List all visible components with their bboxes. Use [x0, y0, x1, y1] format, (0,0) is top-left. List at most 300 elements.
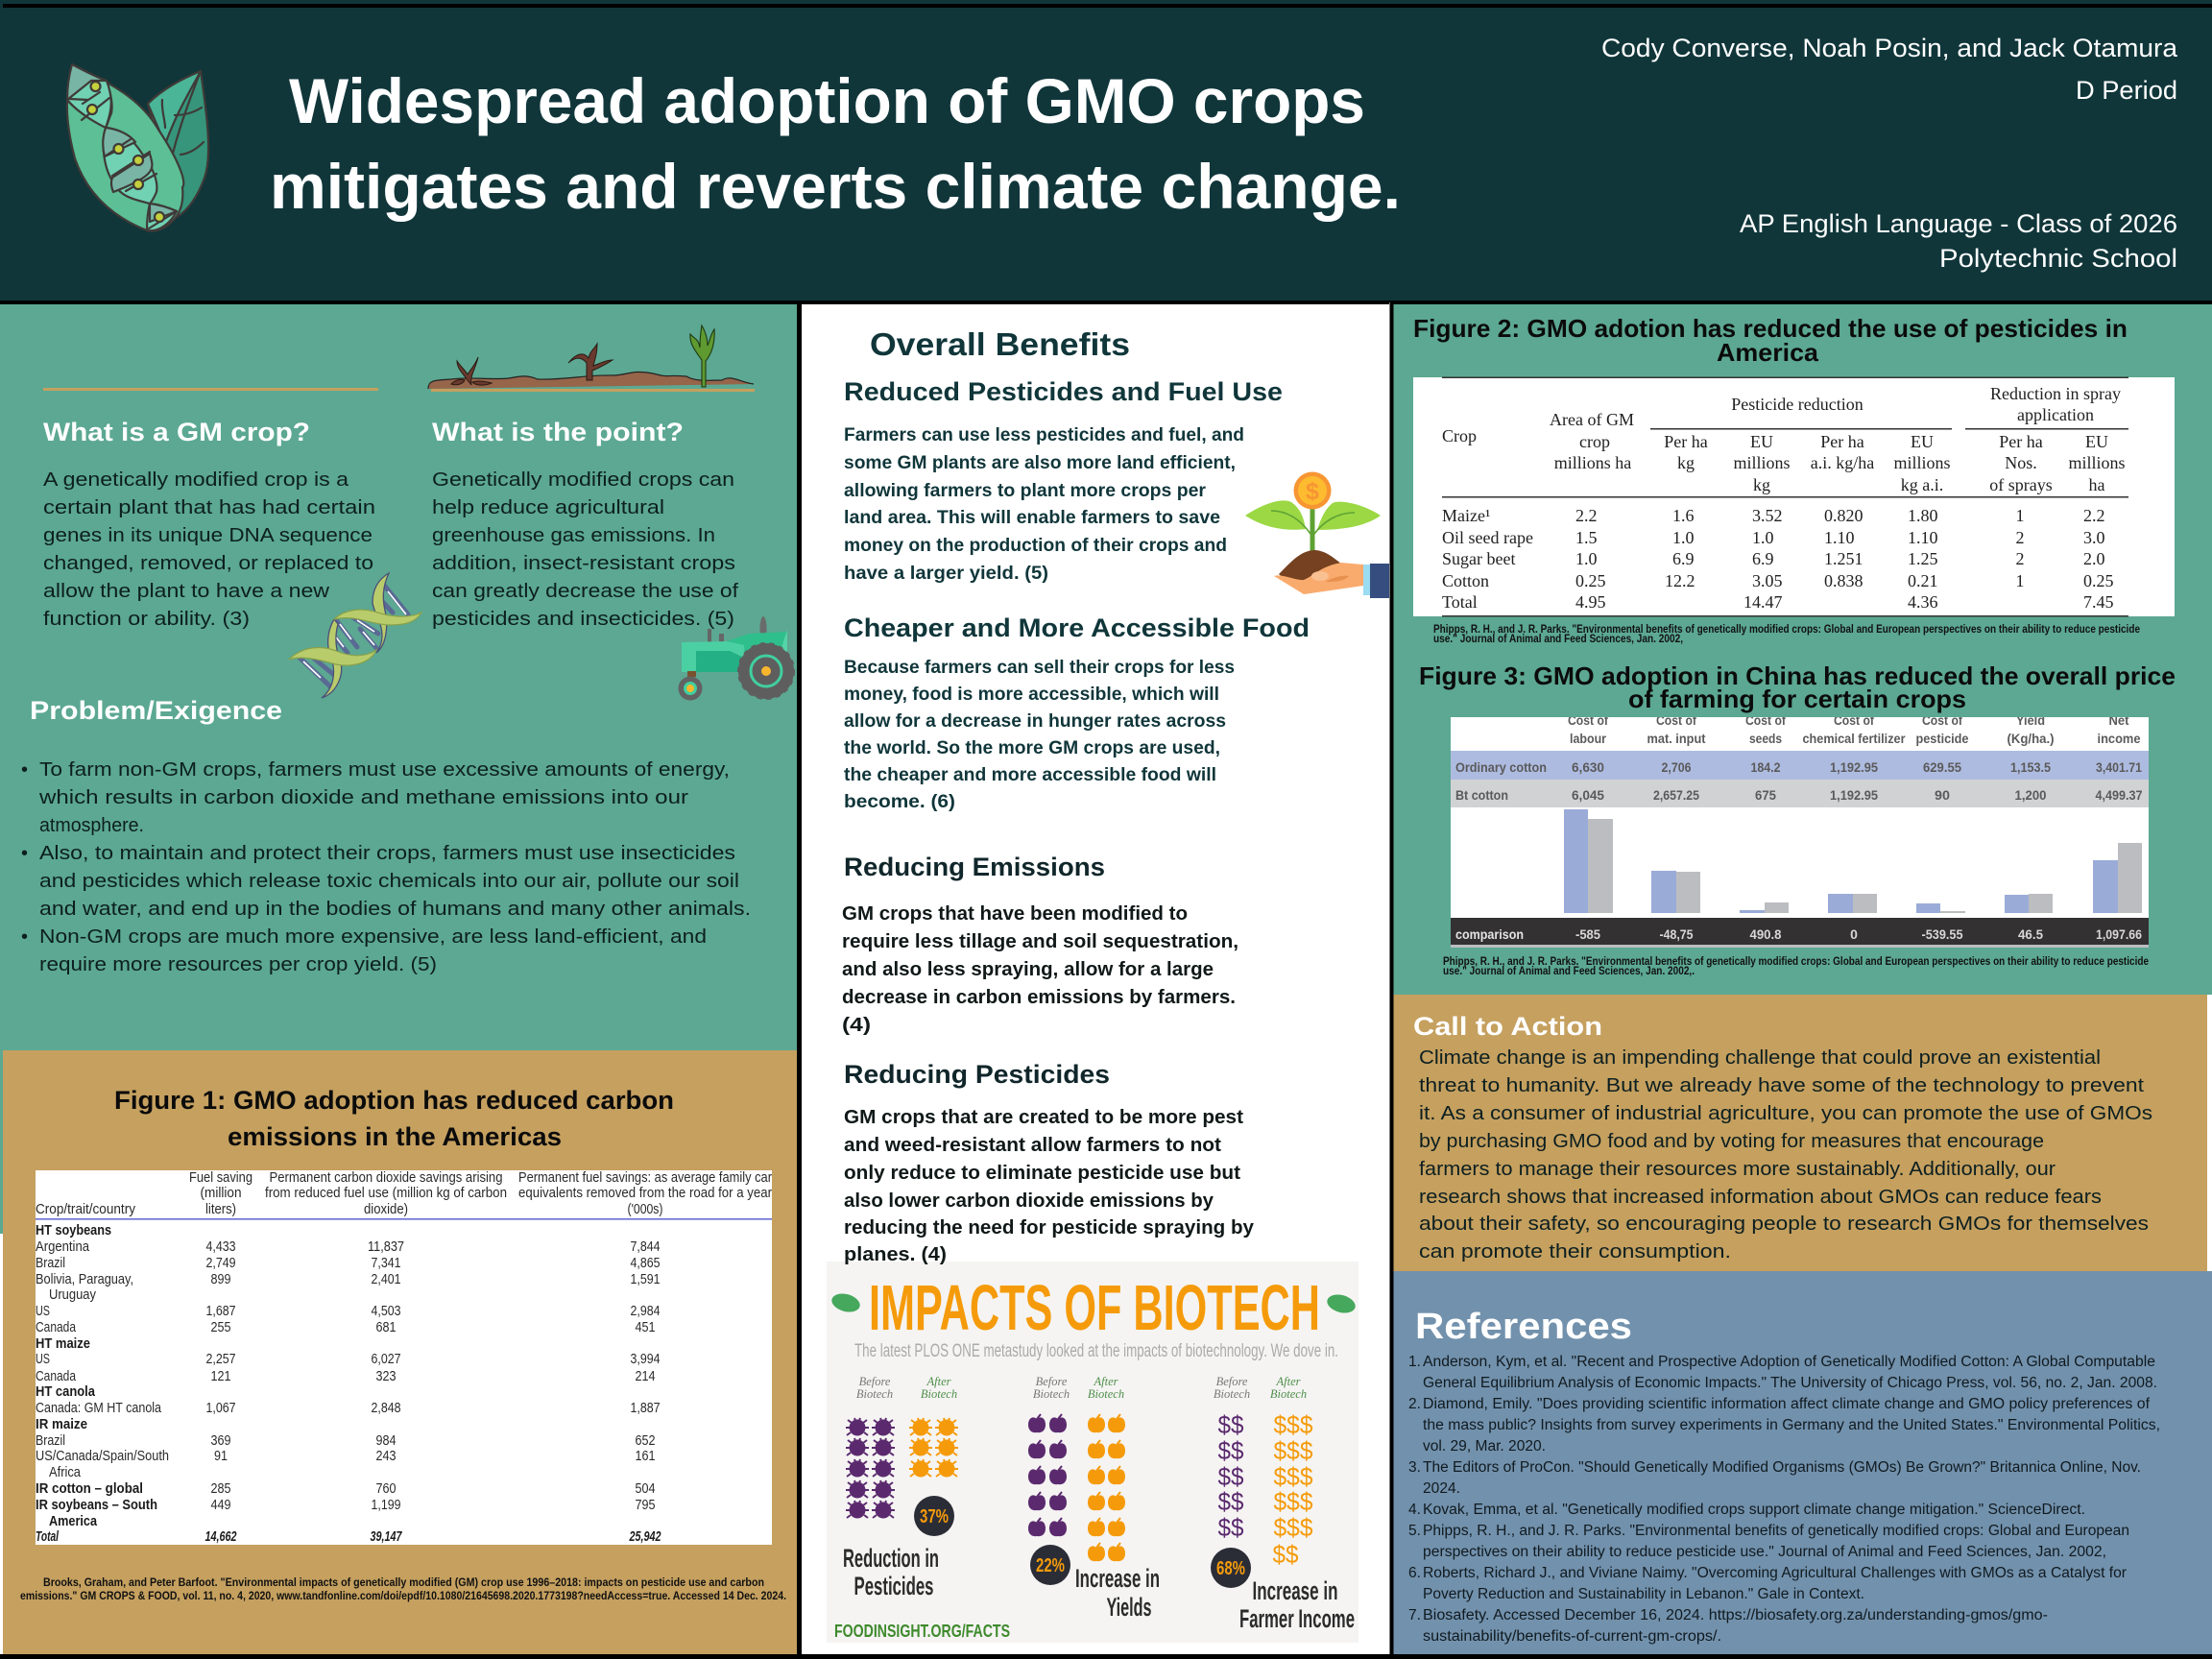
table: pesticide reduction: 2.2 [2083, 506, 2104, 525]
authors and class: D Period [2076, 76, 2177, 105]
heading: reducing pesticides: Reducing Pesticides [844, 1060, 1110, 1089]
list: references: perspectives on their ability to reduce pesticide use." Journal of Animal and Feed Sciences, Jan. 2002, [1423, 1544, 2106, 1560]
table: carbon savings: Brazil [36, 1433, 65, 1449]
citation: figure 1: emissions." GM CROPS & FOOD, vol. 11, no. 4, 2020, www.tandfonline.com/doi/epdf/10.1080/21645698.2020.1773198?needAccess=true. Accessed 14 Dec. 2024. [20, 1591, 786, 1602]
table and bar chart: cotton cost comparison: chemical fertilizer [1803, 731, 1906, 746]
table: carbon savings: Crop/trait/country [36, 1202, 136, 1217]
table and bar chart: cotton cost comparison: comparison [1455, 926, 1524, 942]
figure 2 title: America [1717, 338, 1819, 367]
table: pesticide reduction: EU [1911, 432, 1934, 451]
pictogram: farmer income dollars: $$ [1217, 1462, 1244, 1491]
pictogram: yields apples [1028, 1414, 1160, 1622]
table: pesticide reduction: 0.25 [2083, 571, 2114, 590]
table: pesticide reduction: 0.25 [1575, 571, 1605, 590]
table: pesticide reduction: crop [1579, 432, 1610, 451]
table: carbon savings: 795 [636, 1498, 655, 1513]
table: pesticide reduction: 2.2 [1575, 506, 1598, 525]
table: pesticide reduction: EU [2085, 432, 2108, 451]
table: carbon savings: Brazil [36, 1256, 65, 1271]
table and bar chart: cotton cost comparison: Cost of [1568, 712, 1608, 728]
text block: what is the point: can greatly decrease the use of [432, 581, 739, 602]
table and bar chart: cotton cost comparison: 184.2 [1751, 759, 1781, 775]
table: pesticide reduction: Total [1442, 592, 1478, 612]
list: references: 2. [1408, 1396, 1421, 1412]
text block: reducing emissions: require less tillage and soil sequestration, [842, 931, 1238, 952]
panel: call to action [1393, 995, 2207, 1271]
list: references: 6. [1408, 1565, 1421, 1581]
citation: figure 1 [20, 1577, 786, 1602]
table: carbon savings: 91 [214, 1449, 228, 1464]
table and bar chart: cotton cost comparison: Yield [2016, 712, 2045, 728]
text block: what is a GM crop [43, 469, 375, 630]
before and after labels: After [926, 1375, 951, 1388]
pictogram: farmer income dollars: $$ [1273, 1540, 1299, 1569]
text block: what is the point: help reduce agricultural [432, 497, 664, 518]
table: carbon savings: Permanent fuel savings: as average family car [518, 1170, 772, 1186]
pictogram: yields apples: 22% [1036, 1555, 1065, 1576]
table: carbon savings: America [49, 1514, 98, 1529]
table: pesticide reduction: millions [1733, 453, 1791, 472]
table: carbon savings: Africa [49, 1465, 82, 1480]
text block: reducing pesticides: also lower carbon dioxide emissions by [844, 1190, 1214, 1212]
list: problem bullets: which results in carbon dioxide and methane emissions into our [38, 787, 688, 808]
table: pesticide reduction: 0.838 [1824, 571, 1863, 590]
heading: overall benefits: Overall Benefits [870, 326, 1130, 362]
before and after labels: Before [1216, 1375, 1248, 1388]
table and bar chart: cotton cost comparison: 629.55 [1923, 759, 1961, 775]
table and bar chart: cotton cost comparison: Cost of [1656, 712, 1696, 728]
text block: reduced pesticides and fuel use: money on the production of their crops and [844, 535, 1227, 556]
table: carbon savings: 2,401 [371, 1272, 401, 1287]
panel: right green figures [1393, 304, 2212, 995]
citation: figure 2 [1433, 624, 2140, 645]
text block: reducing pesticides: only reduce to eliminate pesticide use but [844, 1163, 1240, 1184]
list: references: the mass public? Insights from survey experiments in Germany and the United States." Environmental Politics, [1423, 1417, 2160, 1433]
list: references: 1. [1408, 1354, 1421, 1370]
text block: what is a GM crop: allow the plant to have a new [43, 581, 330, 602]
before and after labels [856, 1375, 1307, 1401]
list: references [1408, 1354, 2160, 1645]
table: pesticide reduction: 1.25 [1908, 549, 1937, 568]
before and after labels: Biotech [1214, 1387, 1250, 1401]
table: pesticide reduction: Reduction in spray [1990, 384, 2121, 403]
table and bar chart: cotton cost comparison: 3,401.71 [2096, 759, 2142, 775]
table and bar chart: cotton cost comparison: mat. input [1647, 731, 1706, 746]
table and bar chart: cotton cost comparison: seeds [1749, 731, 1782, 746]
citation: figure 3 [1443, 956, 2149, 977]
table and bar chart: cotton cost comparison: -585 [1575, 926, 1600, 942]
text block: reducing emissions [842, 903, 1238, 1036]
table and bar chart: cotton cost comparison: 1,153.5 [2010, 759, 2051, 775]
figure 3 title: of farming for certain crops [1628, 685, 1966, 713]
icon: tractor [678, 616, 794, 701]
icon: DNA helix [289, 573, 421, 698]
text block: call to action: by purchasing GMO food and by voting for measures that encourage [1419, 1131, 2044, 1152]
list: references: 5. [1408, 1523, 1421, 1539]
table: pesticide reduction: kg [1677, 453, 1695, 472]
text block: cheaper food: the world. So the more GM crops are used, [844, 737, 1220, 758]
panel: center overall benefits [802, 304, 1391, 1654]
text block: what is a GM crop: function or ability. (3) [43, 609, 250, 630]
text block: cheaper food: the cheaper and more accessible food will [844, 764, 1216, 785]
table and bar chart: cotton cost comparison: (Kg/ha.) [2007, 731, 2055, 746]
table and bar chart: cotton cost comparison: 90 [1935, 787, 1950, 803]
table and bar chart: cotton cost comparison: 0 [1850, 926, 1858, 942]
before and after labels: Before [859, 1375, 891, 1388]
text block: what is a GM crop: changed, removed, or replaced to [43, 553, 373, 574]
table: carbon savings: 214 [636, 1369, 655, 1384]
panel: left green intro [0, 304, 798, 1234]
text block: call to action [1419, 1047, 2152, 1262]
pictogram: farmer income dollars: $$ [1217, 1487, 1244, 1516]
table: carbon savings: 4,503 [371, 1304, 401, 1319]
table: carbon savings: 899 [211, 1272, 230, 1287]
heading: cheaper food: Cheaper and More Accessible Food [844, 613, 1310, 642]
infographic title [830, 1272, 1358, 1361]
table: carbon savings: Uruguay [49, 1287, 97, 1303]
table: carbon savings: 6,027 [371, 1352, 401, 1367]
text block: call to action: research shows that increased information about GMOs can reduce fears [1419, 1187, 2102, 1208]
table: pesticide reduction: kg a.i. [1901, 475, 1943, 494]
table: pesticide reduction: 2.0 [2083, 549, 2104, 568]
table: carbon savings: IR maize [36, 1417, 87, 1432]
text block: call to action: it. As a consumer of industrial agriculture, you can promote the use of GMOs [1419, 1103, 2152, 1124]
text block: reducing pesticides: reducing the need for pesticide spraying by [844, 1217, 1255, 1238]
table: pesticide reduction: Per ha [1820, 432, 1864, 451]
heading: reducing emissions: Reducing Emissions [844, 853, 1105, 881]
table: pesticide reduction: 1.10 [1908, 528, 1937, 547]
table: carbon savings: 3,994 [630, 1352, 661, 1367]
icon: soil and growing seedlings [428, 325, 755, 392]
pictogram: farmer income dollars: $$$ [1273, 1513, 1313, 1542]
list: references: The Editors of ProCon. "Should Genetically Modified Organisms (GMOs) Be Grown?" Britannica Online, Nov. [1423, 1459, 2141, 1476]
title [270, 65, 1401, 222]
table and bar chart: cotton cost comparison: 2,706 [1661, 759, 1692, 775]
table: pesticide reduction: of sprays [1989, 475, 2053, 494]
table: carbon savings: 25,942 [629, 1529, 661, 1545]
pictogram: farmer income dollars: Increase in [1252, 1576, 1338, 1605]
table: carbon savings: equivalents removed from the road for a year [518, 1186, 772, 1201]
text block: call to action: threat to humanity. But we already have some of the technology to prevent [1419, 1075, 2145, 1096]
table: carbon savings: IR soybeans – South [36, 1498, 157, 1513]
table: pesticide reduction: a.i. kg/ha [1811, 453, 1874, 472]
table: carbon savings: 681 [376, 1320, 396, 1335]
pictogram: pesticides bugs: 37% [920, 1506, 949, 1527]
table: carbon savings: Argentina [36, 1239, 90, 1255]
table: carbon savings: 39,147 [371, 1529, 402, 1545]
table: pesticide reduction: 1 [2016, 506, 2024, 525]
table: carbon savings: 2,848 [371, 1401, 401, 1416]
table: pesticide reduction: 4.95 [1575, 592, 1605, 612]
table: carbon savings: 760 [376, 1481, 396, 1497]
table: pesticide reduction: ha [2089, 475, 2104, 494]
table: carbon savings: Canada: GM HT canola [36, 1401, 162, 1416]
pictogram: pesticides bugs: Pesticides [854, 1572, 933, 1600]
text block: call to action: can promote their consumption. [1419, 1241, 1731, 1262]
citation: figure 3: use." Journal of Animal and Feed Sciences, Jan. 2002,. [1443, 966, 1695, 977]
infographic: impacts of biotech [827, 1262, 1358, 1643]
heading: what is the point: What is the point? [432, 418, 684, 446]
list: references: Biosafety. Accessed December 16, 2024. https://biosafety.org.za/understanding-gmos/gmo- [1423, 1607, 2048, 1623]
table and bar chart: cotton cost comparison: 46.5 [2018, 926, 2043, 942]
table: pesticide reduction: 1.0 [1575, 549, 1598, 568]
table: pesticide reduction: 1.80 [1908, 506, 1937, 525]
authors and class: Polytechnic School [1939, 244, 2177, 273]
table: pesticide reduction: 0.21 [1908, 571, 1937, 590]
list: references: Phipps, R. H., and J. R. Parks. "Environmental benefits of genetically modified crops: Global and European [1423, 1523, 2129, 1539]
table and bar chart: cotton cost comparison: Cost of [1922, 712, 1962, 728]
table: pesticide reduction: Cotton [1442, 571, 1489, 590]
text block: what is a GM crop: certain plant that has had certain [43, 497, 375, 518]
text block: what is the point: pesticides and insecticides. (5) [432, 609, 734, 630]
text block: reduced pesticides and fuel use: Farmers can use less pesticides and fuel, and [844, 424, 1244, 445]
table: carbon savings: 161 [636, 1449, 655, 1464]
text block: call to action: Climate change is an impending challenge that could prove an existential [1419, 1047, 2101, 1069]
table: carbon savings: 2,984 [630, 1304, 661, 1319]
icon: hand holding money plant [1245, 472, 1391, 598]
text block: reducing pesticides [844, 1107, 1255, 1265]
table and bar chart: cotton cost comparison: Net [2108, 712, 2129, 728]
heading: what is a GM crop: What is a GM crop? [43, 418, 310, 446]
table: carbon savings: 14,662 [205, 1529, 236, 1545]
table: carbon savings: 449 [211, 1498, 230, 1513]
pictogram: farmer income dollars: $$ [1217, 1410, 1244, 1439]
figure 2 title [1413, 314, 2128, 367]
list: problem bullets: require more resources per crop yield. (5) [39, 954, 437, 975]
table: carbon savings: US/Canada/Spain/South [36, 1449, 169, 1464]
table: pesticide reduction: kg [1753, 475, 1770, 494]
table: pesticide reduction: application [2017, 405, 2094, 424]
list: references: Poverty Reduction and Sustainability in Lebanon." Gale in Context. [1423, 1586, 1864, 1602]
pictogram: farmer income dollars: $$$ [1273, 1410, 1313, 1439]
pictogram: farmer income dollars: $$ [1217, 1436, 1244, 1465]
list: references: sustainability/benefits-of-current-gm-crops/. [1423, 1628, 1721, 1645]
list: problem bullets: • [21, 926, 28, 948]
table: pesticide reduction: 14.47 [1743, 592, 1782, 612]
text block: reduced pesticides and fuel use [844, 424, 1244, 584]
list: references: 2024. [1423, 1480, 1460, 1497]
text block: what is a GM crop: genes in its unique DNA sequence [43, 525, 373, 546]
text block: reduced pesticides and fuel use: allowing farmers to plant more crops per [844, 480, 1206, 501]
table: pesticide reduction: 1.10 [1824, 528, 1855, 547]
table: carbon savings: 323 [376, 1369, 396, 1384]
figure 3 title: Figure 3: GMO adoption in China has reduced the overall price [1419, 661, 2176, 690]
table and bar chart: cotton cost comparison: Cost of [1745, 712, 1786, 728]
table: pesticide reduction: 2 [2016, 549, 2024, 568]
table: pesticide reduction: Nos. [2005, 453, 2037, 472]
table and bar chart: cotton cost comparison: Ordinary cotton [1455, 759, 1547, 775]
table and bar chart: cotton cost comparison: pesticide [1916, 731, 1969, 746]
table and bar chart: cotton cost comparison: 2,657.25 [1653, 787, 1699, 803]
table: carbon savings: HT canola [36, 1384, 96, 1400]
table: carbon savings: 2,257 [205, 1352, 236, 1367]
pictogram: farmer income dollars: 68% [1216, 1558, 1245, 1579]
table: carbon savings: US [36, 1304, 50, 1319]
text block: what is the point: greenhouse gas emissions. In [432, 525, 715, 546]
table: carbon savings: Bolivia, Paraguay, [36, 1272, 133, 1287]
list: references: 4. [1408, 1502, 1421, 1518]
heading: reduced pesticides and fuel use: Reduced Pesticides and Fuel Use [844, 377, 1283, 406]
table: pesticide reduction: 4.36 [1908, 592, 1937, 612]
table and bar chart: cotton cost comparison: income [2097, 731, 2141, 746]
infographic title: IMPACTS OF BIOTECH [869, 1272, 1320, 1344]
table: pesticide reduction: Per ha [1999, 432, 2043, 451]
icon: hand holding money plant: $ [1306, 478, 1319, 505]
text block: cheaper food: allow for a decrease in hunger rates across [844, 710, 1226, 732]
table: carbon savings: 285 [211, 1481, 230, 1497]
table: pesticide reduction: Per ha [1664, 432, 1708, 451]
pictogram: pesticides bugs [843, 1418, 958, 1600]
pictogram: pesticides bugs: Reduction in [843, 1544, 939, 1573]
before and after labels: Biotech [1270, 1387, 1307, 1401]
text block: cheaper food: become. (6) [844, 791, 955, 812]
table: pesticide reduction: 1.5 [1575, 528, 1598, 547]
table and bar chart: cotton cost comparison: 6,045 [1572, 787, 1604, 803]
table: pesticide reduction: 6.9 [1672, 549, 1694, 568]
text block: reducing emissions: decrease in carbon emissions by farmers. [842, 987, 1236, 1008]
table: carbon savings: Fuel saving [189, 1170, 252, 1186]
table: pesticide reduction: 2 [2016, 528, 2024, 547]
heading: references: References [1415, 1307, 1632, 1347]
table: pesticide reduction [1413, 376, 2175, 616]
text block: reduced pesticides and fuel use: land area. This will enable farmers to save [844, 507, 1220, 528]
table and bar chart: cotton cost comparison: 1,192.95 [1830, 759, 1878, 775]
text block: cheaper food: money, food is more accessible, which will [844, 684, 1219, 705]
text block: what is the point: Genetically modified crops can [432, 469, 734, 491]
table: carbon savings: 451 [636, 1320, 655, 1335]
before and after labels: After [1275, 1375, 1301, 1388]
panel: references [1393, 1271, 2212, 1654]
authors and class: AP English Language - Class of 2026 [1740, 209, 2177, 238]
table and bar chart: cotton cost comparison: 675 [1755, 787, 1776, 803]
list: problem bullets: and pesticides which release toxic chemicals into our air, pollute our soil [39, 871, 739, 892]
table: carbon savings: US [36, 1352, 50, 1367]
figure 1 title: emissions in the Americas [228, 1122, 562, 1151]
table: carbon savings: 121 [211, 1369, 230, 1384]
text block: what is the point: addition, insect-resistant crops [432, 553, 735, 574]
table and bar chart: cotton cost comparison: 1,200 [2014, 787, 2047, 803]
table: carbon savings: ('000s) [628, 1202, 662, 1217]
text block: reduced pesticides and fuel use: some GM plants are also more land efficient, [844, 452, 1236, 473]
list: references: vol. 29, Mar. 2020. [1423, 1438, 1546, 1455]
title: mitigates and reverts climate change. [270, 151, 1401, 222]
table: pesticide reduction: millions [2068, 453, 2126, 472]
table: carbon savings: 652 [636, 1433, 655, 1449]
table: pesticide reduction: Oil seed rape [1442, 528, 1533, 547]
list: problem bullets: Also, to maintain and protect their crops, farmers must use insecticides [39, 843, 735, 864]
table: pesticide reduction: 3.05 [1752, 571, 1782, 590]
table and bar chart: cotton cost comparison: Cost of [1834, 712, 1874, 728]
pictogram: farmer income dollars: Farmer Income [1239, 1604, 1355, 1633]
table: carbon savings: 255 [211, 1320, 230, 1335]
figure 2 title: Figure 2: GMO adotion has reduced the use of pesticides in [1413, 314, 2128, 343]
header band [0, 0, 2212, 304]
list: references: 7. [1408, 1607, 1421, 1623]
figure 1 title [114, 1086, 674, 1151]
table and bar chart: cotton cost comparison: 1,192.95 [1830, 787, 1878, 803]
authors and class: Cody Converse, Noah Posin, and Jack Otamura [1601, 34, 2178, 62]
table and bar chart: cotton cost comparison: -48,75 [1659, 926, 1694, 942]
before and after labels: Biotech [1088, 1387, 1124, 1401]
list: problem bullets: Non-GM crops are much more expensive, are less land-efficient, and [39, 926, 707, 948]
table: pesticide reduction: millions [1893, 453, 1951, 472]
table and bar chart: cotton cost comparison: 490.8 [1749, 926, 1782, 942]
table: carbon savings: HT soybeans [36, 1223, 111, 1238]
table: carbon savings: 1,887 [630, 1401, 661, 1416]
title: Widespread adoption of GMO crops [289, 65, 1365, 136]
text block: what is a GM crop: A genetically modified crop is a [43, 469, 349, 491]
table: carbon savings: IR cotton – global [36, 1481, 143, 1497]
figure 1 title: Figure 1: GMO adoption has reduced carbon [114, 1086, 674, 1115]
list: references: Roberts, Richard J., and Viviane Naimy. "Overcoming Agricultural Challenges with GMOs as a Catalyst for [1423, 1565, 2127, 1581]
table and bar chart: cotton cost comparison [1451, 712, 2149, 948]
table: carbon savings: from reduced fuel use (million kg of carbon [265, 1186, 507, 1201]
table: carbon savings: 2,749 [205, 1256, 236, 1271]
list: problem bullets: • [21, 843, 28, 864]
citation: figure 2: use." Journal of Animal and Feed Sciences, Jan. 2002, [1433, 634, 1683, 645]
authors and class [1601, 34, 2178, 273]
before and after labels: Before [1036, 1375, 1068, 1388]
table: carbon savings: 369 [211, 1433, 230, 1449]
table: pesticide reduction: Crop [1442, 426, 1477, 445]
table: carbon savings: liters) [205, 1202, 236, 1217]
table: carbon savings: 11,837 [368, 1239, 404, 1255]
table: carbon savings: Canada [36, 1320, 77, 1335]
table: pesticide reduction: 7.45 [2083, 592, 2114, 612]
list: references: Kovak, Emma, et al. "Genetically modified crops support climate change mitigation." ScienceDirect. [1423, 1502, 2085, 1518]
text block: reducing emissions: GM crops that have been modified to [842, 903, 1188, 925]
pictogram: farmer income dollars [1211, 1410, 1355, 1633]
table: carbon savings: 1,067 [205, 1401, 236, 1416]
table: carbon savings: 4,865 [630, 1256, 661, 1271]
table: pesticide reduction: 3.52 [1752, 506, 1782, 525]
list: problem bullets: To farm non-GM crops, farmers must use excessive amounts of energy, [39, 759, 730, 781]
before and after labels: Biotech [1033, 1387, 1070, 1401]
table: pesticide reduction: Pesticide reduction [1731, 395, 1863, 414]
text block: cheaper food: Because farmers can sell their crops for less [844, 657, 1235, 678]
table: pesticide reduction: Area of GM [1550, 410, 1634, 429]
table and bar chart: cotton cost comparison: Bt cotton [1455, 787, 1508, 803]
table: pesticide reduction: 1.0 [1672, 528, 1694, 547]
panel: figure 1 [3, 1050, 798, 1654]
text block: call to action: farmers to manage their resources more sustainably. Additionally, our [1419, 1159, 2056, 1180]
table: pesticide reduction: 3.0 [2083, 528, 2104, 547]
table: pesticide reduction: 0.820 [1824, 506, 1863, 525]
text block: what is the point [432, 469, 739, 630]
table: carbon savings: (million [200, 1186, 242, 1201]
table: carbon savings: Total [36, 1529, 60, 1545]
pictogram: farmer income dollars: $$ [1217, 1513, 1244, 1542]
pictogram: farmer income dollars: $$$ [1273, 1436, 1313, 1465]
table and bar chart: cotton cost comparison: 1,097.66 [2096, 926, 2142, 942]
table: carbon savings: 1,687 [205, 1304, 236, 1319]
list: references: 3. [1408, 1459, 1421, 1476]
table: carbon savings: 504 [636, 1481, 655, 1497]
list: references: Anderson, Kym, et al. "Recent and Prospective Adoption of Genetically Modified Cotton: A Global Computable [1423, 1354, 2155, 1370]
table: carbon savings: 4,433 [205, 1239, 236, 1255]
list: problem bullets: and water, and end up in the bodies of humans and many other animals. [39, 899, 751, 920]
icon: DNA leaves logo [67, 64, 208, 231]
figure 3 title [1419, 661, 2176, 713]
table: pesticide reduction: EU [1750, 432, 1773, 451]
table: pesticide reduction: 1.6 [1672, 506, 1694, 525]
table: carbon savings: Canada [36, 1369, 77, 1384]
table: carbon savings: 7,341 [371, 1256, 401, 1271]
pictogram: yields apples: Yields [1106, 1593, 1152, 1622]
table: carbon savings: 1,591 [630, 1272, 661, 1287]
heading: call to action: Call to Action [1413, 1012, 1602, 1041]
pictogram: farmer income dollars: $$$ [1273, 1487, 1313, 1516]
